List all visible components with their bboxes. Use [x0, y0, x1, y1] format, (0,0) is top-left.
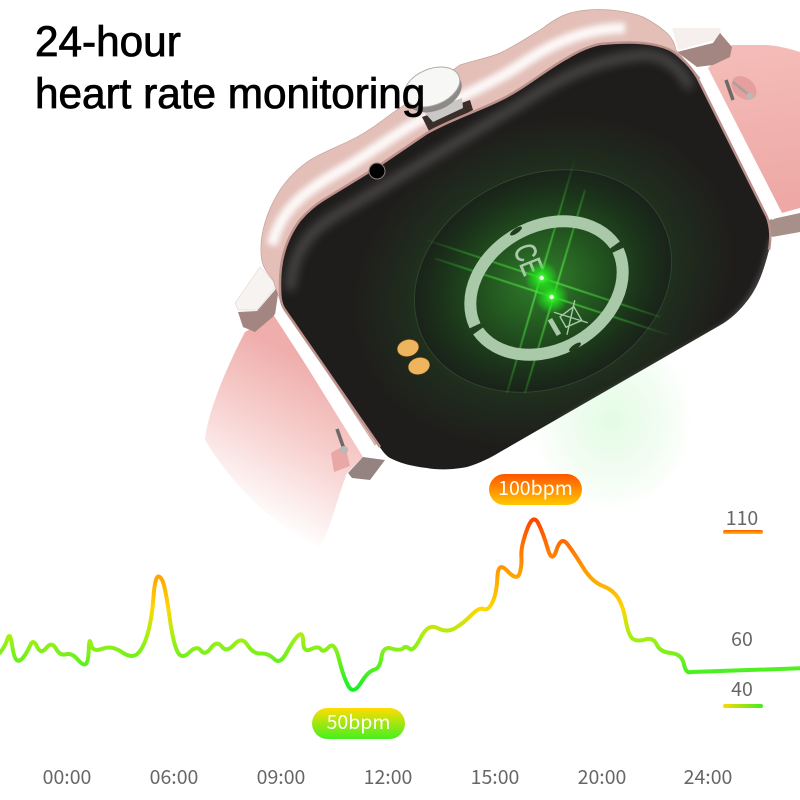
crown stem: [424, 98, 463, 122]
left lug face: [235, 267, 275, 310]
scale value 110: 110: [726, 502, 758, 531]
sensor light rays: [425, 100, 672, 393]
scale value 40: 40: [731, 673, 753, 702]
lower-left pink strap: [205, 315, 363, 547]
green glow behind the watch: [530, 328, 694, 512]
upper buckle pin: [726, 71, 761, 105]
black watch back: [280, 42, 770, 469]
lower buckle pin: [331, 429, 350, 472]
time axis labels: [43, 761, 732, 790]
scale value 60: 60: [731, 623, 753, 652]
badge: 50bpm low: 50bpm: [327, 706, 390, 735]
recycling bin mark: [548, 300, 588, 338]
title: heart rate monitoring: [35, 70, 425, 117]
ring notches: [509, 225, 582, 353]
green sensor dome: [378, 129, 708, 433]
sensor ring: [446, 194, 647, 382]
crown collar: [422, 100, 473, 133]
legend scale: [723, 502, 763, 708]
scale underline 40: [723, 704, 763, 708]
LED point two: [550, 295, 554, 299]
heart rate line chart: [0, 519, 800, 690]
microphone hole: [369, 163, 385, 179]
right white spring bar: [700, 70, 776, 218]
time axis labels: 12:00: [364, 761, 412, 790]
title: 24-hour: [35, 18, 181, 65]
time axis labels: 24:00: [684, 761, 732, 790]
time axis labels: 15:00: [471, 761, 519, 790]
scale underline 110: [723, 530, 763, 534]
rose rim along upper and side edges: [280, 42, 770, 447]
time axis labels: 09:00: [257, 761, 305, 790]
left white spring bar: [277, 313, 368, 453]
CE mark: CE: [507, 239, 550, 280]
crown head: [398, 59, 468, 120]
smartwatch: [205, 9, 800, 547]
time axis labels: 00:00: [43, 761, 91, 790]
gold charging pads: [395, 337, 432, 377]
back surface shading: [282, 46, 770, 424]
rose gold frame: [261, 9, 700, 445]
time axis labels: 20:00: [578, 761, 626, 790]
time axis labels: 06:00: [150, 761, 198, 790]
badge: 100bpm peak: 100bpm: [498, 472, 573, 501]
top-right lug face: [672, 28, 722, 50]
top-right lug rim: [677, 33, 732, 67]
bottom lug: [348, 457, 385, 480]
badge: 50bpm low: [312, 706, 405, 739]
left lug rim: [238, 280, 280, 332]
LED glow two: [535, 280, 569, 314]
upper-right pink strap: [708, 45, 800, 213]
lower-right lug: [768, 213, 800, 237]
frame highlight: [272, 28, 625, 245]
LED glow one: [525, 261, 559, 295]
title: [35, 18, 425, 117]
LED point one: [540, 276, 544, 280]
